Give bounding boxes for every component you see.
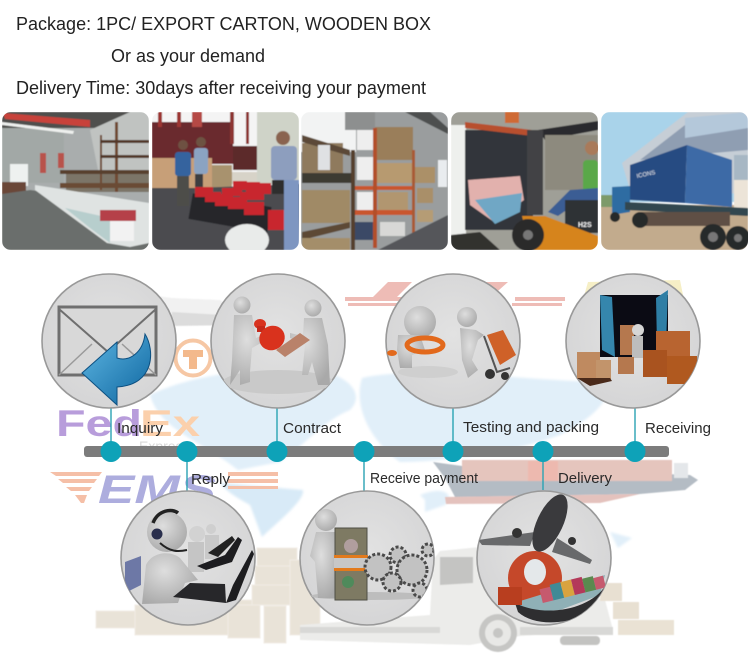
background: delivery truck — [300, 547, 674, 652]
timeline stems — [111, 404, 635, 495]
label: delivery: Delivery — [558, 470, 612, 487]
label: receive payment: Receive payment — [370, 470, 479, 487]
photo: warehouse shelves with cartons — [301, 112, 448, 250]
photo: container truck outside building — [601, 112, 750, 250]
label: inquiry: Inquiry — [117, 420, 164, 437]
step labels — [117, 419, 711, 488]
logo: FedEx — [56, 403, 201, 454]
logo: EMS — [50, 468, 278, 512]
step: delivery plane globe and ship — [477, 489, 611, 625]
logo: FedEx: Ex — [140, 403, 201, 444]
background: container ship — [433, 460, 698, 504]
logo: TNT — [176, 340, 210, 376]
logo: DHL — [345, 282, 565, 306]
photo: container truck outside building: ICONS — [636, 170, 656, 180]
photo: forklift loading container: H2S — [578, 222, 592, 229]
package line: Package: 1PC/ EXPORT CARTON, WOODEN BOX — [16, 14, 431, 34]
step: testing and packing figures — [386, 274, 520, 408]
photo: factory floor with generators — [2, 112, 149, 250]
delivery time line: Delivery Time: 30days after receiving your payment — [16, 78, 426, 98]
step: contract stamping figures — [211, 274, 345, 408]
package text — [16, 14, 431, 98]
process timeline — [84, 404, 669, 495]
step: receiving container and cartons — [566, 274, 700, 408]
step: reply call-centre agents — [121, 491, 255, 625]
step: receive payment dollars and gears — [300, 491, 434, 625]
background: world map — [150, 370, 632, 548]
label: receiving: Receiving — [645, 420, 711, 437]
timeline bar — [84, 446, 669, 457]
photo: forklift loading container — [451, 112, 599, 251]
label: testing and packing: Testing and packing — [463, 419, 599, 436]
logo: FedEx: Express — [139, 438, 190, 454]
package alternative line: Or as your demand — [111, 46, 265, 66]
timeline dots — [100, 441, 646, 462]
label: contract: Contract — [283, 420, 342, 437]
background: carton stack — [96, 548, 320, 643]
logo: FedEx: Fed — [56, 403, 142, 444]
logo: EMS: EMS — [98, 468, 216, 512]
step: inquiry envelope icon — [42, 274, 176, 408]
background: plane — [150, 295, 240, 326]
photo: staff inspecting red engines — [152, 112, 300, 256]
label: reply: Reply — [191, 471, 230, 488]
